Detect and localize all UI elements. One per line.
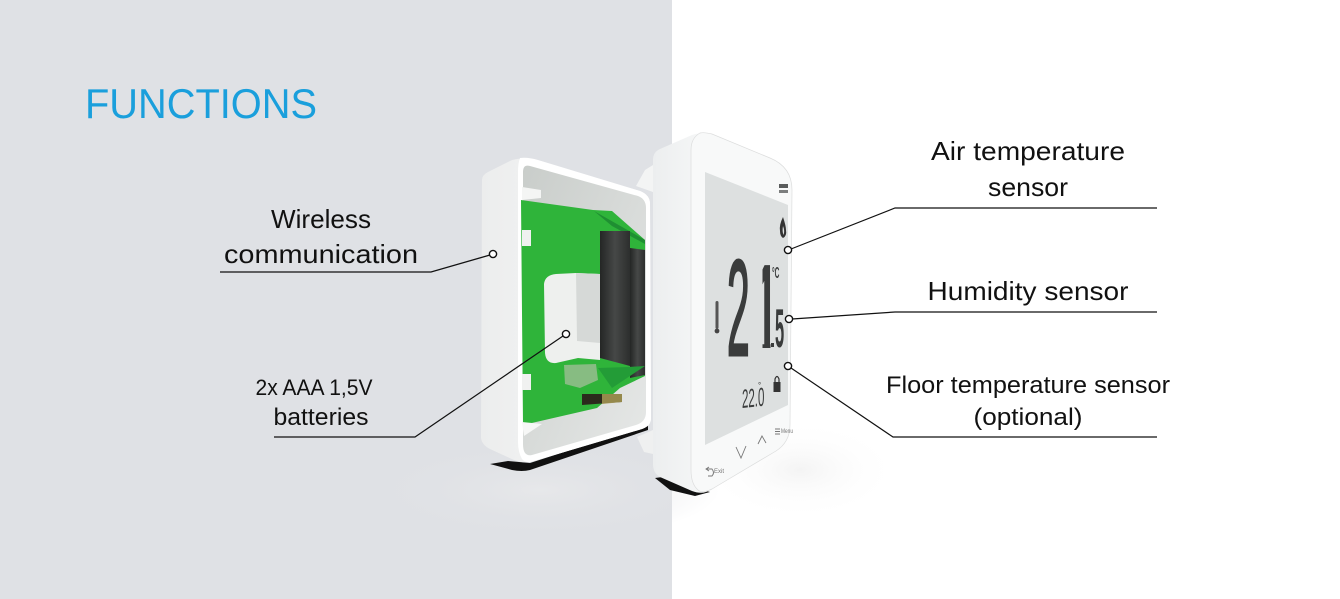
unit label: °C — [772, 264, 780, 282]
device: thermostat front — [636, 133, 793, 496]
callout: wireless communication: Wireless — [271, 204, 371, 234]
icon: thermometer — [715, 301, 719, 333]
LCD screen — [705, 172, 788, 445]
case outer shell — [481, 159, 651, 462]
decimal reading — [771, 297, 784, 359]
callout: floor temperature sensor: (optional) — [974, 404, 1082, 431]
shadow under front — [655, 476, 710, 496]
main temperature reading: 2 — [727, 233, 750, 385]
callout: air temperature sensor: Air temperature — [931, 136, 1125, 166]
callout: wireless communication: communication — [224, 239, 418, 269]
main temperature reading — [728, 258, 770, 356]
main temperature reading: 1 — [754, 238, 778, 388]
icon: lock — [774, 376, 780, 392]
background: grey left panel — [0, 0, 900, 599]
pin header — [582, 394, 622, 405]
callout: wireless communication — [220, 204, 497, 272]
board cut-out — [544, 273, 600, 363]
callout: floor temperature sensor — [784, 362, 1170, 437]
decimal reading: 5 — [775, 297, 784, 359]
green connector block — [564, 364, 598, 388]
icon: flame — [780, 217, 786, 238]
button labels: Exit — [714, 469, 724, 475]
callout: humidity sensor — [785, 276, 1157, 323]
circuit board — [521, 200, 645, 425]
mounting clips — [636, 165, 653, 192]
corner clips — [522, 187, 541, 200]
touch buttons — [706, 429, 780, 476]
thermostat side — [653, 134, 715, 493]
case inner cavity — [523, 166, 646, 455]
secondary temperature reading: ° — [758, 381, 761, 390]
callout: air temperature sensor — [784, 136, 1157, 254]
callout: batteries — [256, 330, 570, 437]
callout: air temperature sensor: sensor — [988, 172, 1068, 202]
device: back case with circuit board — [481, 158, 651, 471]
title: FUNCTIONS — [85, 80, 317, 127]
callout: batteries: batteries — [274, 404, 368, 431]
callout: floor temperature sensor: Floor temperature sensor — [886, 372, 1170, 399]
callout: humidity sensor: Humidity sensor — [928, 276, 1129, 306]
shadow under back case — [490, 425, 648, 471]
secondary temperature reading: 22.0 — [742, 384, 764, 414]
brand logo — [779, 184, 788, 193]
button labels — [714, 429, 793, 475]
button labels: Menu — [781, 429, 793, 435]
thermostat face — [691, 133, 792, 492]
battery pack — [600, 231, 645, 378]
callout: batteries: 2x AAA 1,5V — [256, 375, 373, 400]
